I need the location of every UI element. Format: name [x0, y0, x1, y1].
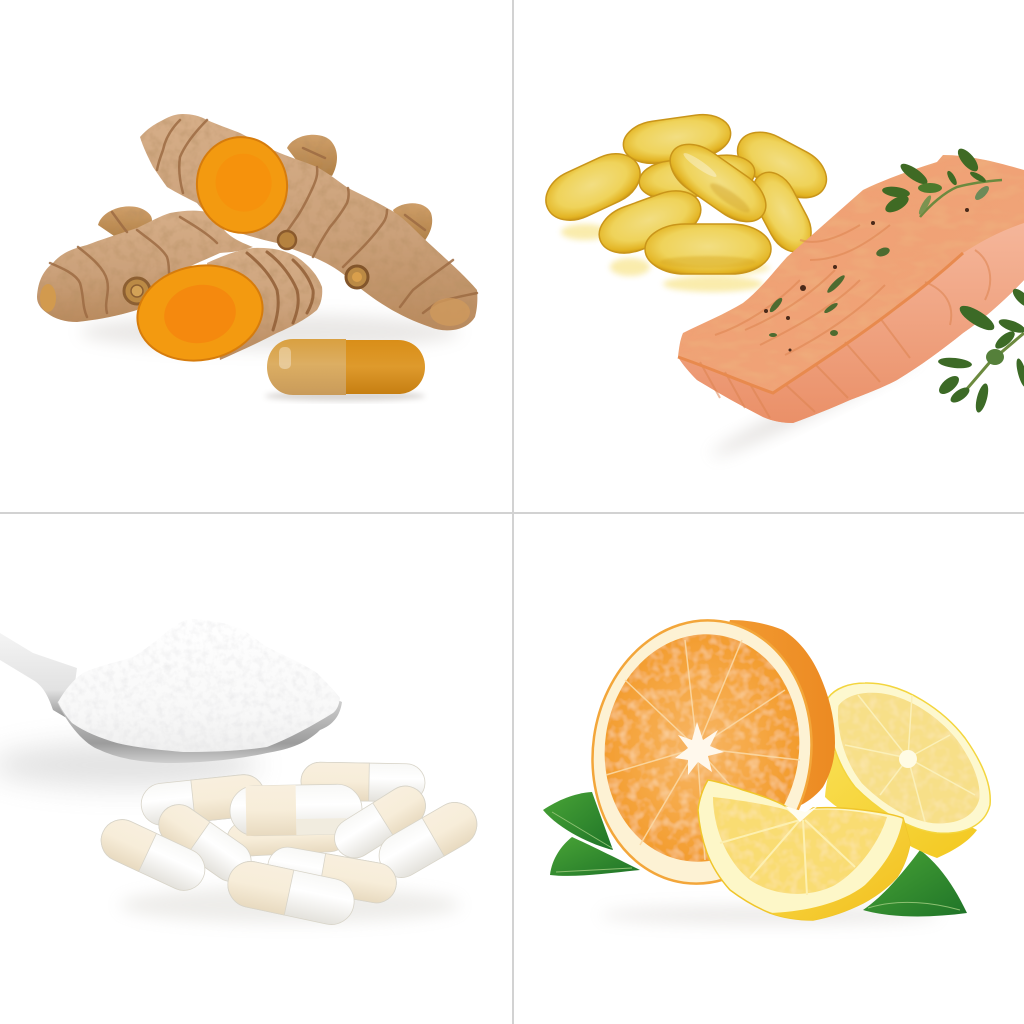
icon: lemon half	[825, 683, 990, 858]
icon: salmon fillet	[678, 155, 1024, 463]
icon: cut face of top root	[189, 130, 295, 240]
reflections of softgels	[561, 224, 770, 292]
panel: omega-3 softgels and salmon	[538, 111, 1024, 463]
icon: top turmeric root	[140, 114, 477, 330]
softgel shading	[660, 150, 756, 268]
icon: softgel capsules	[538, 111, 835, 274]
icon: orange half	[576, 606, 835, 898]
icon: green leaves	[543, 792, 967, 916]
icon: thyme sprig on top of fillet	[881, 145, 1002, 217]
icon: powder heap	[58, 619, 340, 752]
icon: white capsules pile	[94, 762, 485, 929]
icon: front cut turmeric root	[130, 248, 322, 370]
icon: turmeric capsule	[267, 339, 425, 395]
panel: turmeric	[37, 114, 477, 401]
panel: citrus fruits	[543, 606, 990, 924]
panel: white powder and capsules	[0, 619, 485, 929]
icon: thyme sprig lower right	[936, 286, 1024, 414]
icon: lemon wedge	[698, 780, 910, 920]
icon: back turmeric root	[37, 206, 253, 322]
icon: spoon	[0, 633, 342, 763]
